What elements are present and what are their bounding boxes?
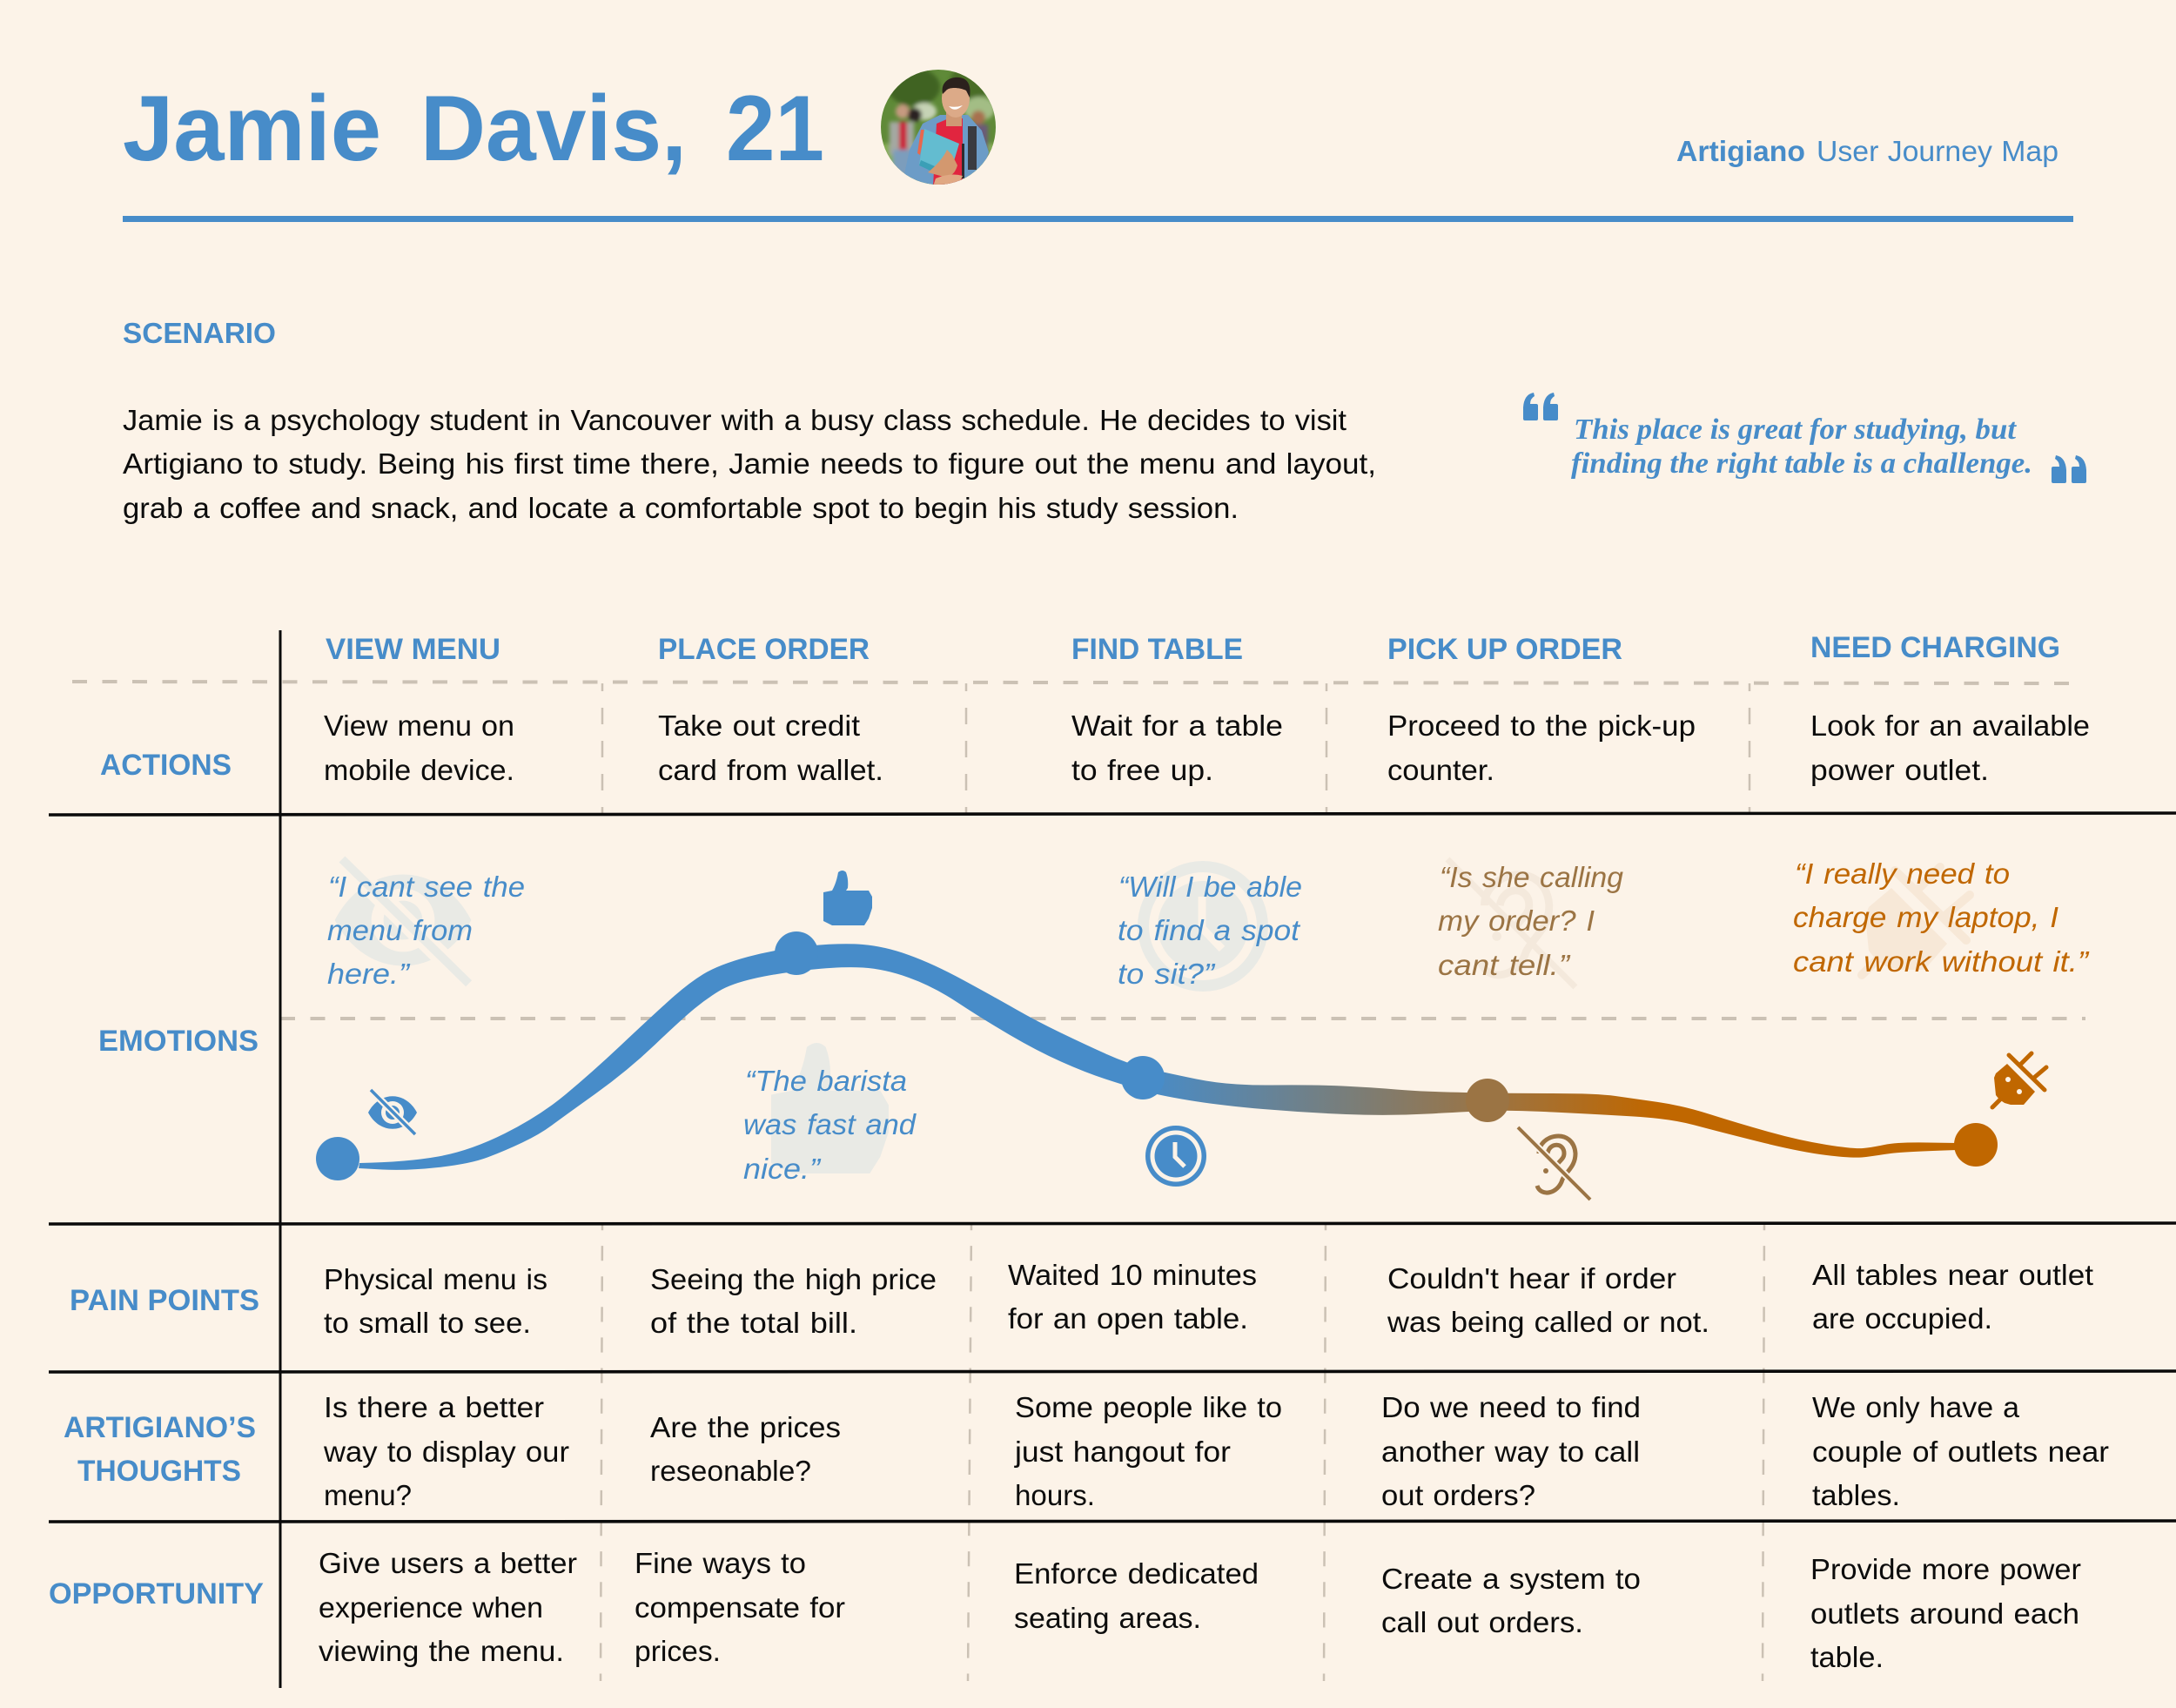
thought cells: out orders? xyxy=(1381,1479,1535,1511)
quote: need charging: “I really need to xyxy=(1795,857,2010,890)
column headings: FIND TABLE xyxy=(1071,633,1243,666)
action cells: Proceed to the pick-up xyxy=(1387,709,1696,742)
quote: need charging: cant work without it.” xyxy=(1793,945,2090,978)
pain point cells: for an open table. xyxy=(1008,1302,1248,1335)
subtitle: Artigiano User Journey Map: Artigiano xyxy=(1676,135,1805,167)
quote: pick up order xyxy=(1438,861,1624,981)
quote: place order xyxy=(743,1065,917,1185)
quote: place order: nice.” xyxy=(743,1153,822,1185)
subtitle: Artigiano User Journey Map: User Journey Map xyxy=(1817,135,2058,167)
ghost icon: plug xyxy=(1862,867,1970,975)
scenario text: Jamie is a psychology student in Vancouver with a busy class schedule. He decides to visit xyxy=(123,404,1347,436)
title: Jamie xyxy=(123,76,381,180)
icon: closing quote marks xyxy=(2052,455,2086,483)
row label: opportunity: OPPORTUNITY xyxy=(49,1577,264,1610)
emotion curve xyxy=(316,931,1998,1180)
icon: clock xyxy=(1145,1126,1206,1187)
pain point cells: Waited 10 minutes xyxy=(1008,1259,1257,1291)
quote: view menu xyxy=(327,871,525,990)
photo: Jamie portrait xyxy=(879,65,997,187)
action cells: counter. xyxy=(1387,754,1494,786)
node: need charging xyxy=(1954,1123,1998,1167)
quote: pick up order: cant tell.” xyxy=(1438,949,1571,981)
opportunity cells: Fine ways to xyxy=(635,1547,806,1579)
scenario text: Artigiano to study. Being his first time there, Jamie needs to figure out the menu and layout, xyxy=(123,447,1376,480)
row label: emotions: EMOTIONS xyxy=(98,1025,259,1058)
row label: actions: ACTIONS xyxy=(100,749,232,782)
row: pain points xyxy=(70,1259,2093,1339)
thought cells: We only have a xyxy=(1812,1391,2020,1423)
pain point cells: to small to see. xyxy=(324,1307,531,1339)
opportunity cells: Enforce dedicated xyxy=(1014,1557,1259,1590)
action cells: Look for an available xyxy=(1810,709,2090,742)
action cells: card from wallet. xyxy=(658,754,883,786)
thought cells: tables. xyxy=(1812,1479,1900,1511)
pain point cells: Couldn't hear if order xyxy=(1387,1262,1676,1294)
thought cells: another way to call xyxy=(1381,1436,1640,1468)
column headings: NEED CHARGING xyxy=(1810,631,2060,664)
node: place order xyxy=(775,931,818,975)
opportunity cells: Provide more power xyxy=(1810,1553,2081,1585)
action cells xyxy=(324,709,2090,786)
action cells: Wait for a table xyxy=(1071,709,1283,742)
action cells: mobile device. xyxy=(324,754,514,786)
pain point cells xyxy=(324,1259,2093,1339)
thought cells: Are the prices xyxy=(650,1411,841,1443)
row label: pain points: PAIN POINTS xyxy=(70,1284,259,1317)
opportunity cells xyxy=(319,1547,2081,1673)
opportunity cells: compensate for xyxy=(635,1591,845,1624)
thought cells: way to display our xyxy=(323,1436,569,1468)
opportunity cells: experience when xyxy=(319,1591,543,1624)
thought cells: hours. xyxy=(1015,1479,1095,1511)
opportunity cells: prices. xyxy=(635,1635,721,1667)
icon: opening quote marks xyxy=(1523,393,1558,420)
quote: pick up order: “Is she calling xyxy=(1440,861,1624,893)
title xyxy=(123,76,824,180)
quote: find table: to sit?” xyxy=(1118,958,1216,990)
column headings: PLACE ORDER xyxy=(658,633,870,666)
quote: find table xyxy=(1118,871,1302,990)
quote: view menu: here.” xyxy=(327,958,411,990)
pain point cells: was being called or not. xyxy=(1387,1306,1709,1338)
row label: thoughts xyxy=(64,1411,256,1488)
icon: unplugged plug xyxy=(1992,1053,2046,1107)
quote: find table: to find a spot xyxy=(1118,914,1301,946)
scenario text: grab a coffee and snack, and locate a comfortable spot to begin his study session. xyxy=(123,492,1239,524)
ghost icon: thumbs up xyxy=(771,1043,889,1173)
thought cells: Do we need to find xyxy=(1381,1391,1641,1423)
pain point cells: Physical menu is xyxy=(324,1263,547,1295)
header rule xyxy=(123,216,2073,222)
ghost icon: eye xyxy=(335,859,471,984)
thought cells: just hangout for xyxy=(1014,1436,1231,1468)
ghost icon: ear xyxy=(1447,859,1575,987)
thought cells: menu? xyxy=(324,1479,412,1511)
icon: eye slash xyxy=(368,1090,417,1134)
row: opportunity xyxy=(49,1547,2081,1673)
row: actions xyxy=(100,709,2090,786)
column headings xyxy=(326,631,2060,666)
icon: thumbs up xyxy=(823,871,872,925)
opportunity cells: seating areas. xyxy=(1014,1602,1201,1634)
node: find table xyxy=(1121,1056,1165,1099)
quote: find table: “Will I be able xyxy=(1118,871,1302,903)
quote: place order: was fast and xyxy=(743,1108,917,1140)
scenario text xyxy=(123,404,1376,524)
title: 21 xyxy=(726,76,824,180)
opportunity cells: Give users a better xyxy=(319,1547,577,1579)
action cells: Take out credit xyxy=(658,709,860,742)
action cells: View menu on xyxy=(324,709,514,742)
node: pick up order xyxy=(1466,1079,1509,1122)
row label: thoughts: ARTIGIANO’S xyxy=(64,1411,256,1444)
action cells: to free up. xyxy=(1071,754,1213,786)
table grid lines xyxy=(49,630,2176,1688)
icon: ear slash xyxy=(1518,1127,1590,1200)
quote text: finding the right table is a challenge. xyxy=(1571,447,2032,480)
title: Davis, xyxy=(420,76,687,180)
opportunity cells: outlets around each xyxy=(1810,1597,2079,1630)
column headings: PICK UP ORDER xyxy=(1387,633,1622,666)
quote text: This place is great for studying, but xyxy=(1574,414,2018,446)
quote: need charging xyxy=(1793,857,2090,978)
thought cells xyxy=(323,1391,2109,1511)
thought cells: couple of outlets near xyxy=(1812,1436,2109,1468)
quote text xyxy=(1571,414,2032,480)
thought cells: Some people like to xyxy=(1015,1391,1282,1423)
quote: place order: “The barista xyxy=(745,1065,907,1097)
quote: view menu: “I cant see the xyxy=(328,871,525,903)
callout: user quote xyxy=(1523,393,2086,483)
thought cells: reseonable? xyxy=(650,1455,811,1487)
pain point cells: are occupied. xyxy=(1812,1302,1992,1335)
node: view menu xyxy=(316,1137,359,1180)
action cells: power outlet. xyxy=(1810,754,1989,786)
row label: thoughts: THOUGHTS xyxy=(77,1455,241,1488)
quote: view menu: menu from xyxy=(327,914,473,946)
column headings: VIEW MENU xyxy=(326,633,500,666)
opportunity cells: call out orders. xyxy=(1381,1606,1583,1638)
pain point cells: Seeing the high price xyxy=(650,1263,937,1295)
subtitle: Artigiano User Journey Map xyxy=(1676,135,2058,167)
quote: pick up order: my order? I xyxy=(1438,904,1595,937)
opportunity cells: table. xyxy=(1810,1641,1884,1673)
ghost icon: clock xyxy=(1138,861,1268,992)
opportunity cells: Create a system to xyxy=(1381,1563,1641,1595)
quote: need charging: charge my laptop, I xyxy=(1793,901,2058,933)
pain point cells: of the total bill. xyxy=(650,1307,857,1339)
thought cells: Is there a better xyxy=(324,1391,544,1423)
curve band xyxy=(359,944,1958,1170)
heading: scenario: SCENARIO xyxy=(123,317,276,349)
opportunity cells: viewing the menu. xyxy=(319,1635,564,1667)
pain point cells: All tables near outlet xyxy=(1812,1259,2093,1291)
row: Artigiano's thoughts xyxy=(64,1391,2109,1511)
